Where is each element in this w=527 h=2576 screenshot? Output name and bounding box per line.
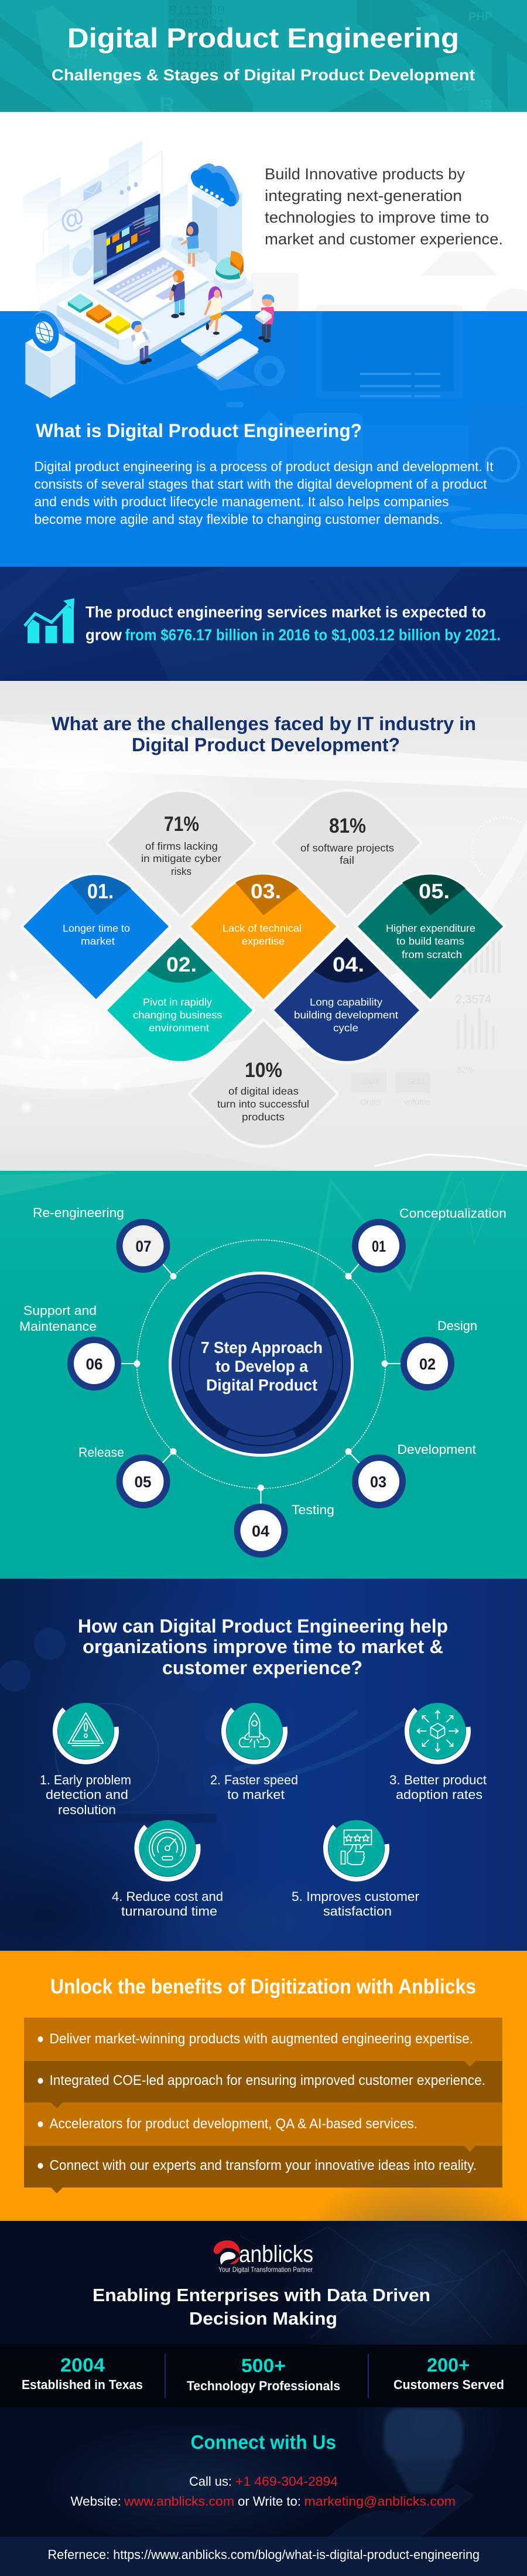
challenge 01: Longer time to [63, 922, 130, 934]
benefit 5: customer satisfaction: satisfaction [323, 1904, 392, 1919]
logo [214, 2240, 313, 2274]
benefit 1: early problem detection: resolution [58, 1802, 116, 1817]
step 01: Conceptualization [399, 1206, 507, 1221]
panel: how digital product engineering helps [0, 1579, 527, 1998]
subtitle: Challenges & Stages of Digital Product Development [52, 66, 475, 84]
heading: customer experience? [162, 1657, 362, 1678]
panel: challenges: volume [404, 1097, 430, 1106]
panel: 7 step approach [0, 1171, 527, 1579]
stat: 81%: fail [340, 854, 354, 866]
heading: What is Digital Product Engineering? [36, 420, 362, 441]
panel: about anblicks [0, 2168, 527, 2549]
panel: header [0, 0, 527, 117]
step 06: 06 [85, 1355, 103, 1373]
step 04: 04 [252, 1522, 269, 1540]
panel: what is digital product engineering [0, 311, 527, 567]
logo: Your Digital Transformation Partner [218, 2265, 313, 2274]
title: Digital Product Engineering [67, 22, 459, 53]
contact details: marketing@anblicks.com [304, 2494, 456, 2509]
body text: Digital product engineering is a process of product design and development. It [34, 459, 494, 474]
benefit 3: product adoption: adoption rates [396, 1787, 482, 1802]
stat: 2004: 2004 [60, 2354, 105, 2376]
panel: unlock benefits [0, 1951, 527, 2221]
challenge 01 [23, 875, 169, 999]
intro text: technologies to improve time to [265, 209, 489, 226]
stat: 71%: of firms lacking [145, 840, 218, 852]
heading: What are the challenges faced by IT industry in [52, 713, 476, 734]
benefit 2: faster speed [210, 1703, 298, 1802]
challenge 02: 02. [166, 953, 197, 976]
panel: intro white [0, 112, 527, 311]
benefit 4: reduce cost: 4. Reduce cost and [112, 1889, 223, 1904]
center label [201, 1338, 323, 1394]
benefit 1: early problem detection: 1. Early problem [40, 1773, 131, 1787]
center label: 7 Step Approach [201, 1338, 323, 1357]
panel: header: PHP [468, 11, 492, 23]
step 02: Design [437, 1318, 477, 1333]
stat: 81%: 81% [329, 815, 366, 837]
panel: challenges [0, 681, 527, 1171]
panel: header: 1011100 [169, 59, 225, 74]
stat: 71% [108, 792, 254, 915]
step 02: 02 [419, 1355, 436, 1373]
challenge 03: expertise [242, 935, 285, 947]
panel: header: 1011110 [169, 45, 225, 60]
challenge 02 [107, 938, 252, 1061]
benefit 3: product adoption: 3. Better product [389, 1773, 487, 1787]
challenge 04: Long capability [310, 996, 382, 1008]
panel: challenges: Order [360, 1097, 381, 1106]
stat: 10%: of digital ideas [228, 1085, 299, 1097]
step 01 [352, 1206, 507, 1273]
intro text: integrating next-generation [265, 187, 462, 205]
market statement [85, 604, 501, 643]
challenge 05 [358, 875, 503, 999]
center circle [169, 1272, 354, 1457]
stat: 500+: Technology Professionals [187, 2379, 340, 2393]
icon: rising bar chart [25, 598, 74, 643]
benefit row 2: Integrated COE-led approach for ensuring improved customer experience. [49, 2073, 485, 2088]
benefit row 4: Connect with our experts and transform your innovative ideas into reality. [49, 2158, 477, 2173]
panel: challenges: 82% [457, 1065, 473, 1074]
panel: header: C# [452, 77, 472, 94]
market statement: from $676.17 billion in 2016 to $1,003.12 billion by 2021. [125, 626, 501, 643]
challenge 03: Lack of technical [223, 922, 302, 934]
heading: How can Digital Product Engineering help [78, 1616, 448, 1637]
connector dots [121, 1264, 401, 1504]
benefit 1: early problem detection: detection and [46, 1787, 128, 1802]
challenge 05: 05. [419, 880, 450, 903]
step 07: 07 [136, 1238, 151, 1255]
panel: header: 0111100 [169, 4, 225, 19]
body text: and ends with product lifecycle management. It also helps companies [34, 494, 449, 509]
step 06: Support and [23, 1303, 97, 1318]
benefit 4: reduce cost [112, 1820, 223, 1919]
body text [34, 459, 494, 527]
heading: Digital Product Development? [132, 734, 400, 755]
stats band [0, 2345, 527, 2407]
step 03: 03 [370, 1473, 386, 1491]
benefit row 4 [24, 2146, 502, 2193]
dotted ring [137, 1240, 385, 1488]
heading: Enabling Enterprises with Data Driven [93, 2285, 430, 2305]
panel: header: JS [114, 70, 136, 89]
center label: Digital Product [206, 1376, 317, 1394]
stat: 71%: in mitigate cyber [141, 853, 221, 864]
stat: 71%: risks [171, 866, 191, 877]
step 02 [401, 1318, 477, 1391]
stat: 81%: of software projects [300, 842, 394, 854]
challenge 05: Higher expenditure [386, 922, 475, 934]
challenge 03 [191, 875, 336, 999]
step 05: 05 [135, 1473, 151, 1491]
step 07 [33, 1205, 170, 1273]
connect heading: Connect with Us [191, 2431, 336, 2453]
stat: 10%: 10% [245, 1059, 282, 1082]
challenge 01: market [81, 935, 115, 947]
body text: become more agile and stay flexible to changing customer demands. [34, 512, 443, 527]
benefit 1: early problem detection [40, 1703, 131, 1817]
center label: to Develop a [215, 1357, 308, 1375]
panel: challenges: 2,3574 [456, 993, 491, 1006]
stat: 81% [275, 792, 420, 915]
market statement: The product engineering services market is expected to [85, 604, 486, 621]
contact details: www.anblicks.com [124, 2494, 234, 2509]
step 05 [78, 1445, 170, 1508]
step 06: Maintenance [19, 1319, 97, 1334]
challenge 02: Pivot in rapidly [143, 996, 212, 1008]
challenge 04: cycle [333, 1022, 358, 1034]
step 04 [234, 1502, 334, 1558]
heading [78, 1616, 448, 1678]
illustration: isometric laptop with team [23, 141, 274, 398]
benefit 4: reduce cost: turnaround time [121, 1904, 217, 1919]
challenge 05: from scratch [402, 949, 462, 960]
footer reference: Refernece: https://www.anblicks.com/blog/what-is-digital-product-engineering [48, 2547, 480, 2562]
intro text: Build Innovative products by [265, 165, 466, 183]
panel: header: 1001001 [169, 17, 225, 32]
heading [93, 2285, 430, 2329]
stat: 10%: products [242, 1111, 285, 1123]
step 04: Testing [292, 1502, 334, 1517]
challenge 01: 01. [87, 880, 114, 903]
step 06 [19, 1303, 121, 1391]
contact details: Call us: [189, 2474, 232, 2489]
challenge 04 [274, 938, 419, 1061]
panel: header: JS [477, 98, 491, 111]
stat: 2004: Established in Texas [22, 2377, 143, 2392]
step 01: 01 [372, 1238, 386, 1255]
challenge 02: changing business [133, 1009, 223, 1021]
benefit row 3: Accelerators for product development, QA & AI-based services. [49, 2116, 418, 2132]
panel: challenges: USD [363, 1001, 388, 1014]
stat: 2004 [22, 2354, 143, 2392]
challenge 03: 03. [251, 880, 281, 903]
panel: header: R [159, 93, 174, 117]
stat: 200+ [393, 2354, 504, 2392]
contact details: or Write to: [238, 2494, 301, 2509]
illustration: isometric laptop with team: @ [56, 202, 88, 237]
heading: organizations improve time to market & [83, 1636, 443, 1657]
challenge 04: building development [294, 1009, 398, 1021]
stat: 10% [191, 1021, 336, 1145]
step 03: Development [397, 1442, 476, 1457]
benefit 2: faster speed: to market [227, 1787, 285, 1802]
panel: challenges: SELL [407, 1076, 427, 1086]
step 05: Release [78, 1445, 124, 1460]
heading: Decision Making [189, 2308, 337, 2329]
heading: Unlock the benefits of Digitization with Anblicks [50, 1975, 476, 1998]
stat: 200+: Customers Served [393, 2377, 504, 2392]
heading [52, 713, 476, 755]
benefit row 1: Deliver market-winning products with augmented engineering expertise. [49, 2031, 473, 2047]
benefit row 1 [24, 2018, 502, 2061]
benefit 5: customer satisfaction [292, 1820, 420, 1919]
benefit row 2 [24, 2061, 502, 2103]
benefit 5: customer satisfaction: 5. Improves customer [292, 1889, 420, 1904]
stat: 71%: 71% [164, 813, 199, 836]
contact details: +1 469-304-2894 [235, 2474, 338, 2489]
panel: challenges: BUY [363, 1076, 380, 1086]
stat: 500+ [187, 2355, 340, 2393]
challenge 04: 04. [333, 953, 364, 976]
panel: market growth stat band [0, 567, 527, 681]
intro text [265, 165, 503, 248]
challenge 05: to build teams [396, 935, 464, 947]
challenge 02: environment [149, 1022, 209, 1034]
intro text: market and customer experience. [265, 230, 503, 248]
stat: 500+: 500+ [241, 2355, 286, 2376]
stat: 200+: 200+ [427, 2354, 470, 2376]
step 07: Re-engineering [33, 1205, 124, 1220]
benefit 3: product adoption [389, 1703, 487, 1802]
benefit row 3 [24, 2103, 502, 2146]
contact details [70, 2474, 456, 2509]
panel: header: 1001010 [169, 31, 225, 46]
step 03 [352, 1442, 476, 1508]
contact details: Website: [70, 2494, 121, 2509]
panel: header: C# [66, 43, 89, 63]
footer reference [0, 2537, 527, 2576]
logo: anblicks [239, 2241, 313, 2267]
body text: consists of several stages that start with the digital development of a product [34, 476, 487, 492]
market statement: grow [85, 626, 122, 643]
benefit 2: faster speed: 2. Faster speed [210, 1773, 298, 1787]
stat: 10%: turn into successful [217, 1098, 309, 1110]
